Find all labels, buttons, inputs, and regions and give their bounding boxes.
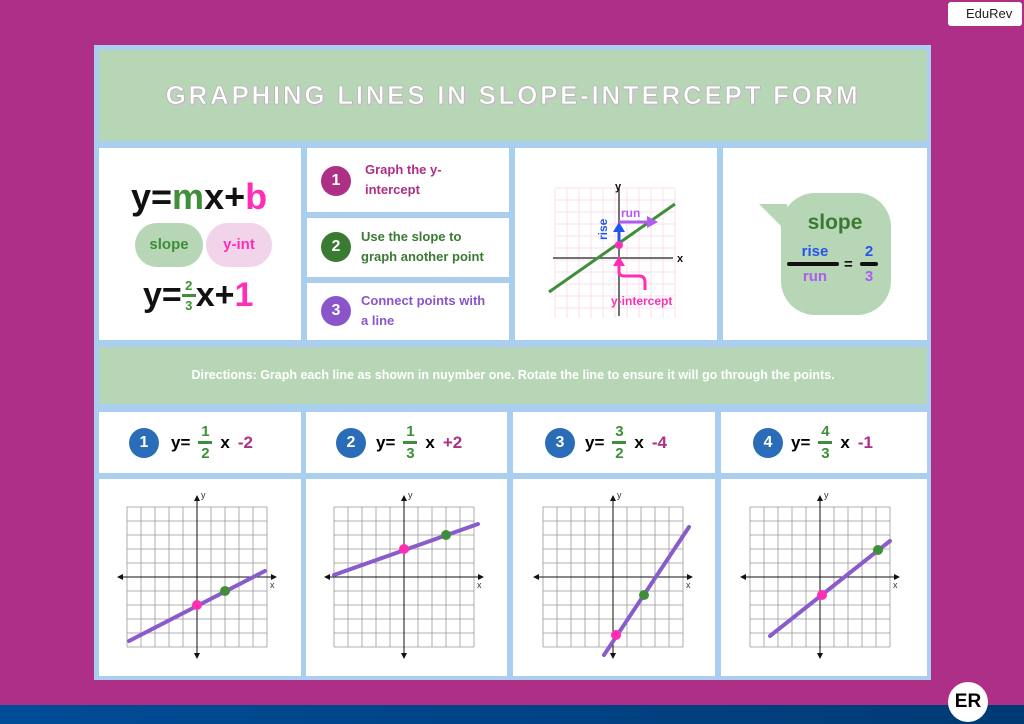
graph 2 xyxy=(324,490,484,659)
header 3: 3 2 xyxy=(615,423,624,462)
title band xyxy=(99,50,927,141)
panel: slope bubble: run xyxy=(803,268,827,285)
badge: ER: ER xyxy=(955,691,981,712)
bubble y-int xyxy=(206,223,272,267)
formula y=2/3x+1: 1 xyxy=(235,276,253,314)
bubble slope xyxy=(135,223,203,267)
header 2: 1 3 xyxy=(406,423,415,462)
graph 4 xyxy=(740,490,900,659)
header 4: -1 xyxy=(858,432,873,452)
panel: example graph xyxy=(515,148,717,340)
header 2: 2 xyxy=(347,434,355,451)
header 4: 4 3 xyxy=(821,423,830,462)
header 4: 4 xyxy=(764,434,772,451)
header 4: y= x xyxy=(791,432,850,452)
step 2: graph another point xyxy=(361,249,484,264)
frame xyxy=(94,45,931,680)
formula y=mx+b: y=mx+b xyxy=(131,176,267,217)
graph 3 xyxy=(533,490,693,659)
logo: EduRev xyxy=(948,2,1022,26)
header 2: y= x xyxy=(376,432,435,452)
rise arrow xyxy=(618,230,620,244)
panel: slope bubble: = xyxy=(844,256,853,273)
header 3 xyxy=(513,412,715,473)
header 2: +2 xyxy=(443,432,462,452)
step 3: a line xyxy=(361,313,394,328)
step 1: Graph the y- xyxy=(365,162,442,177)
step 1: intercept xyxy=(365,182,420,197)
header 3: 3 xyxy=(556,434,564,451)
header 1: -2 xyxy=(238,432,253,452)
step 1: 1 xyxy=(332,172,340,189)
bottom band xyxy=(0,705,1024,724)
header 1: 1 2 xyxy=(201,423,210,462)
header 2 xyxy=(306,412,507,473)
logo: EduRev: EduRev xyxy=(966,6,1012,21)
panel: formula xyxy=(99,148,301,340)
header 3: -4 xyxy=(652,432,667,452)
directions band: Directions: Graph each line as shown in nuymber one. Rotate the line to ensure it will go through the points. xyxy=(191,368,835,382)
header 1: y= x xyxy=(171,432,230,452)
panel: example graph: y-intercept xyxy=(611,294,672,308)
step 2: Use the slope to xyxy=(361,229,461,244)
panel: slope bubble xyxy=(723,148,927,340)
header 3: y= x xyxy=(585,432,644,452)
graph 1 xyxy=(117,490,277,659)
step 3: Connect points with xyxy=(361,293,485,308)
y-intercept arrow xyxy=(619,264,645,290)
panel: example graph: x xyxy=(677,253,684,265)
panel: slope bubble: rise xyxy=(802,243,828,260)
header 4 xyxy=(721,412,927,473)
bubble slope: slope xyxy=(149,236,189,253)
badge: ER xyxy=(948,682,988,722)
title: GRAPHING LINES IN SLOPE-INTERCEPT FORM xyxy=(166,80,860,110)
panel: slope bubble: slope xyxy=(808,211,862,234)
directions band xyxy=(99,347,927,404)
run arrow xyxy=(619,220,649,224)
panel: example graph: rise xyxy=(596,218,610,240)
bubble y-int: y-int xyxy=(223,236,255,253)
line xyxy=(549,204,675,292)
panel: example graph: y xyxy=(615,181,622,193)
formula y=2/3x+1: 2 3 xyxy=(185,278,192,313)
step 2 xyxy=(307,218,509,277)
step 3 xyxy=(307,283,509,340)
panel: slope bubble: 2 xyxy=(865,243,873,260)
header 1 xyxy=(99,412,301,473)
step 3: 3 xyxy=(332,302,340,319)
panel: slope bubble: 3 xyxy=(865,268,873,285)
panel: example graph: run xyxy=(621,206,640,220)
graph cells background xyxy=(99,479,301,676)
step 2: 2 xyxy=(332,238,340,255)
step 1 xyxy=(307,148,509,212)
header 1: 1 xyxy=(140,434,148,451)
formula y=2/3x+1: y= x+ xyxy=(143,276,235,314)
